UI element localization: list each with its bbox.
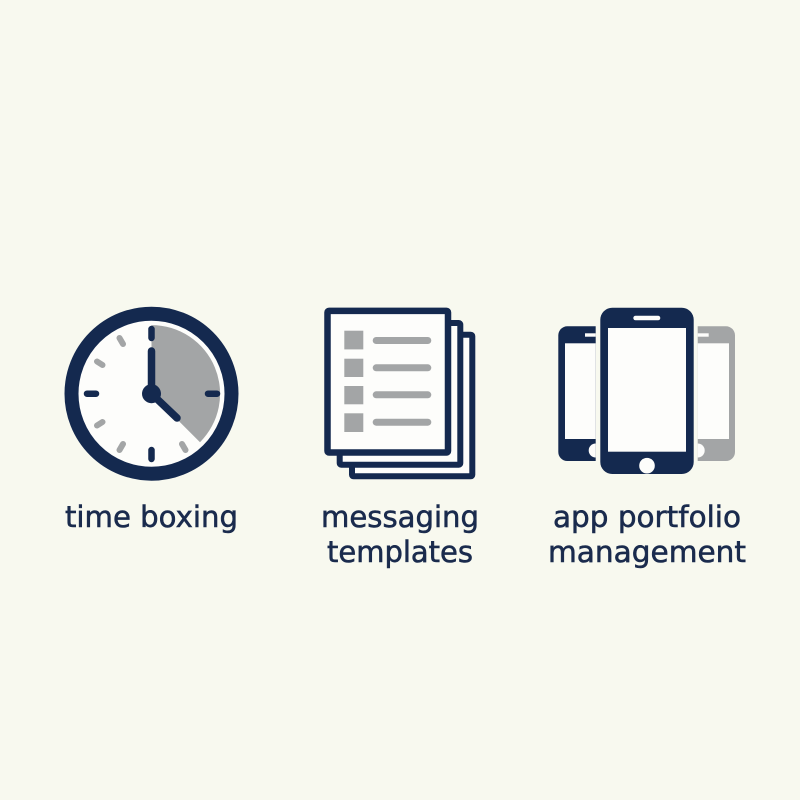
front phone bbox=[600, 308, 694, 474]
clock hands bbox=[152, 351, 177, 418]
icon: app portfolio phones bbox=[558, 308, 735, 474]
right phone bbox=[698, 326, 735, 461]
label: messaging templates: messaging bbox=[321, 500, 479, 534]
label: app portfolio management bbox=[548, 500, 746, 569]
left phone bbox=[558, 326, 596, 461]
icon: clock bbox=[72, 314, 232, 474]
label: app portfolio management: app portfolio bbox=[553, 500, 741, 534]
front page bbox=[328, 311, 448, 452]
label: messaging templates bbox=[321, 500, 479, 569]
label: time boxing: time boxing bbox=[65, 500, 238, 534]
minor ticks bbox=[97, 338, 186, 450]
icon: stacked message templates bbox=[328, 311, 472, 476]
label: app portfolio management: management bbox=[548, 535, 746, 569]
middle page bbox=[340, 323, 460, 465]
clock hub bbox=[142, 384, 161, 403]
label: messaging templates: templates bbox=[327, 535, 473, 569]
hour ticks bbox=[87, 329, 217, 459]
clock face bbox=[72, 314, 232, 474]
highlighted time wedge bbox=[152, 325, 220, 442]
back page bbox=[352, 335, 472, 476]
template rows bbox=[344, 331, 431, 432]
